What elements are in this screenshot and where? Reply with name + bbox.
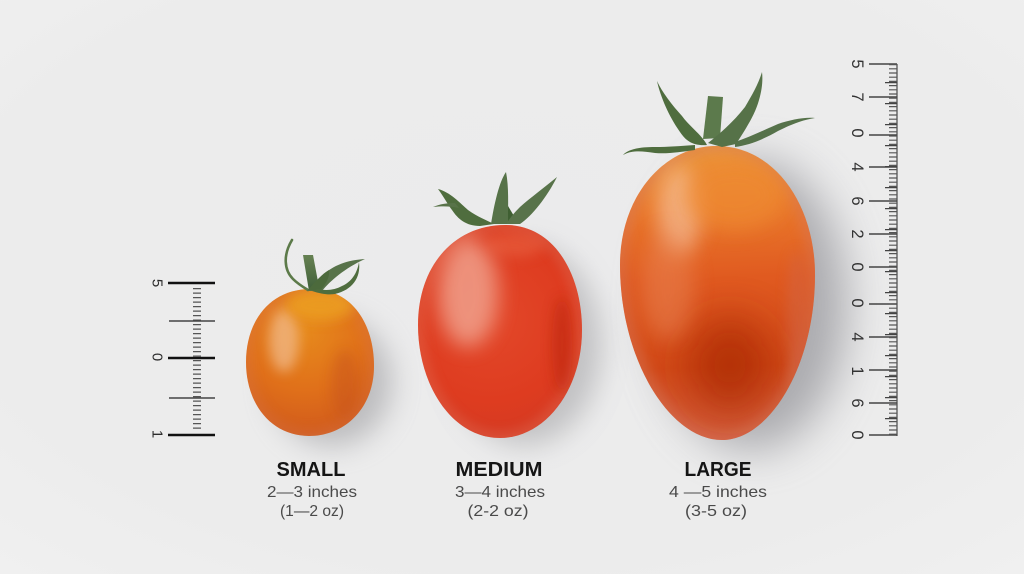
shadows [272,160,847,450]
label: small: (1—2 oz) [280,503,344,520]
label: small: 2—3 inches [267,484,357,501]
label: medium [455,459,545,520]
label: large: LARGE [684,459,752,481]
label: medium: MEDIUM [456,459,542,481]
large ruler: 6 [848,196,866,206]
label: large: 4 —5 inches [669,484,767,501]
large ruler: 0 [848,298,866,308]
label: medium: 3—4 inches [455,484,545,501]
medium tomato [418,172,582,438]
large tomato [620,72,815,440]
large ruler: 1 [848,366,866,376]
large ruler: 0 [848,262,866,272]
large ruler: 7 [848,92,866,102]
small ruler [149,279,215,438]
small tomato [246,240,374,436]
small ruler: 5 [149,279,166,287]
small ruler: 0 [149,353,166,361]
large ruler: 4 [848,162,866,172]
large ruler: 5 [848,59,866,69]
small ruler: 1 [149,430,166,438]
large ruler: 6 [848,398,866,408]
large ruler [848,59,897,440]
label: large [669,459,767,520]
label: medium: (2-2 oz) [468,503,528,520]
large ruler: 0 [848,430,866,440]
large ruler: 0 [848,128,866,138]
label: large: (3-5 oz) [685,503,747,520]
large ruler: 4 [848,332,866,342]
large ruler: 2 [848,229,866,239]
label: small [267,459,357,520]
label: small: SMALL [277,459,345,481]
